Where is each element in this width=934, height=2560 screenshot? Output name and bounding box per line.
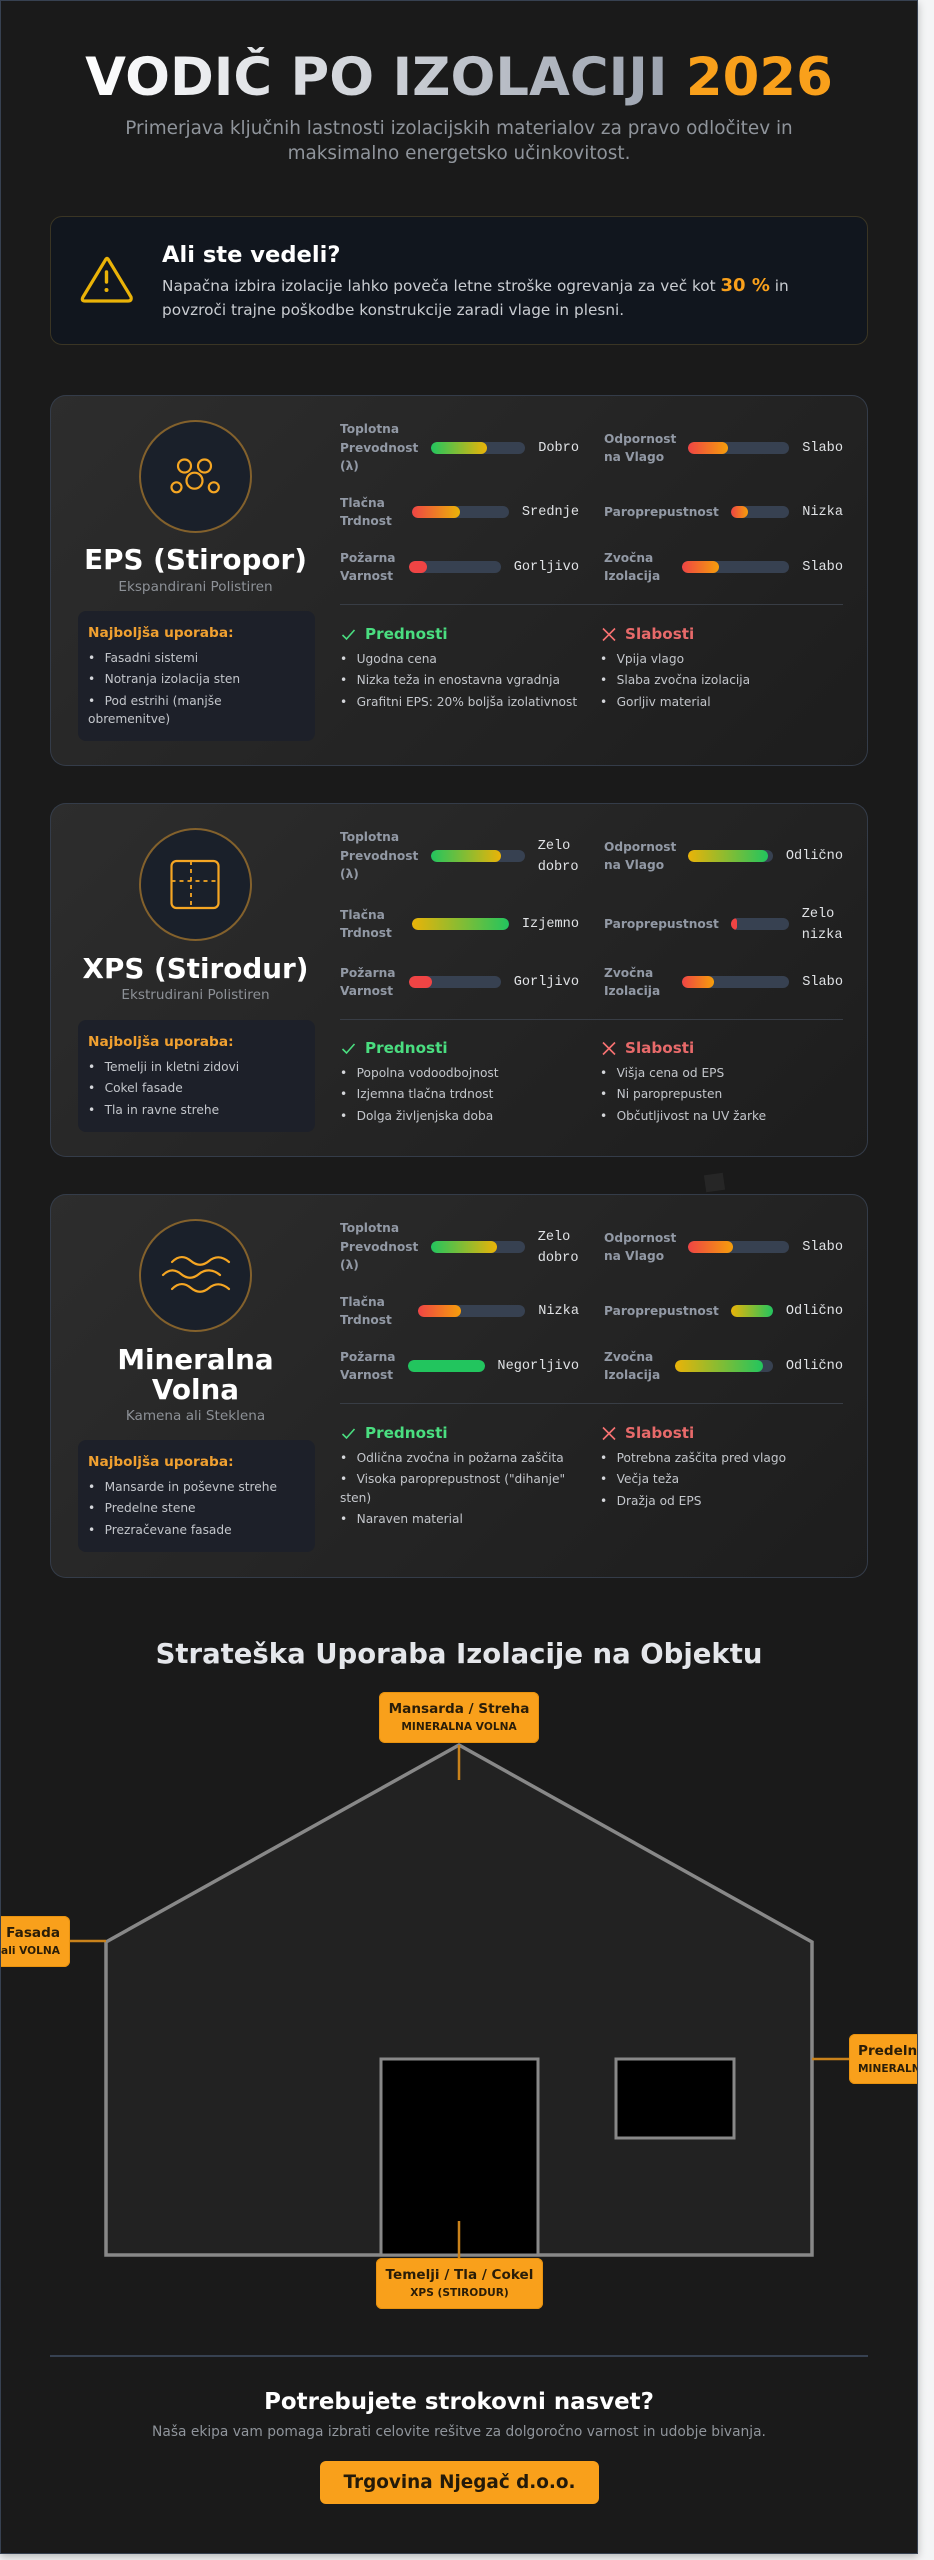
advantages bbox=[340, 1424, 590, 1524]
metric: moisture resistance: Odpornost bbox=[604, 1231, 676, 1245]
metric: compressive strength: Tlačna bbox=[340, 496, 385, 510]
alert heading: Ali ste vedeli? bbox=[162, 242, 340, 268]
disadvantages list: Ni paroprepusten bbox=[617, 1087, 722, 1101]
metric: thermal conductivity: (λ) bbox=[340, 459, 359, 473]
advantages bbox=[340, 1039, 499, 1123]
metric: fire safety: Požarna bbox=[340, 966, 396, 980]
best use list: • bbox=[88, 651, 95, 665]
material name: XPS (Stirodur) bbox=[83, 952, 308, 985]
icon: XPS board bbox=[139, 828, 252, 941]
metric: compressive strength: Srednje bbox=[522, 505, 579, 520]
metric: sound insulation: Zvočna bbox=[604, 1350, 653, 1364]
roof material: MINERALNA VOLNA bbox=[401, 1721, 517, 1733]
advantages list: • bbox=[340, 652, 347, 666]
alert text: povzroči trajne poškodbe konstrukcije zaradi vlage in plesni. bbox=[162, 301, 624, 319]
metric: moisture resistance: na Vlago bbox=[604, 858, 664, 872]
metric: thermal conductivity: Prevodnost bbox=[340, 441, 418, 455]
metric: compressive strength: Trdnost bbox=[340, 926, 392, 940]
best use list: Mansarde in poševne strehe bbox=[105, 1480, 277, 1494]
metric: compressive strength: Tlačna bbox=[340, 1295, 385, 1309]
metric: sound insulation: Izolacija bbox=[604, 569, 660, 583]
metric: thermal conductivity: Prevodnost bbox=[340, 849, 418, 863]
metric: fire safety: Požarna bbox=[340, 1350, 396, 1364]
metric: compressive strength: Trdnost bbox=[340, 1313, 392, 1327]
icon: warning triangle bbox=[80, 256, 133, 303]
alert text bbox=[162, 275, 789, 319]
metric: thermal conductivity: dobro bbox=[538, 860, 578, 875]
metric: moisture resistance: Slabo bbox=[802, 441, 843, 456]
disadvantages heading: Slabosti bbox=[625, 625, 694, 643]
material subtitle: Kamena ali Steklena bbox=[126, 1408, 265, 1424]
best use list: • bbox=[88, 1523, 95, 1537]
metric: vapour permeability: Zelo bbox=[802, 906, 834, 922]
best use list: • bbox=[88, 1501, 95, 1515]
disadvantages list: • bbox=[600, 1494, 607, 1508]
metric: moisture resistance: Slabo bbox=[802, 1240, 843, 1255]
metric: compressive strength bbox=[340, 908, 579, 940]
advantages list: Grafitni EPS: 20% boljša izolativnost bbox=[357, 695, 577, 709]
metric: thermal conductivity bbox=[340, 830, 578, 881]
metric: fire safety: Gorljivo bbox=[514, 560, 579, 575]
metric: moisture resistance: na Vlago bbox=[604, 1249, 664, 1263]
company button bbox=[320, 2461, 599, 2504]
metric: fire safety: Varnost bbox=[340, 569, 393, 583]
company button: Trgovina Njegač d.o.o. bbox=[343, 2472, 576, 2493]
best use list: Cokel fasade bbox=[105, 1081, 183, 1095]
best use list bbox=[88, 1480, 277, 1537]
best use list: • bbox=[88, 694, 95, 708]
metric: sound insulation: Slabo bbox=[802, 975, 843, 990]
disadvantages list: • bbox=[600, 673, 607, 687]
disadvantages list: • bbox=[600, 1472, 607, 1486]
advantages list: sten) bbox=[340, 1491, 371, 1505]
metric: sound insulation: Zvočna bbox=[604, 966, 653, 980]
metric: thermal conductivity: Toplotna bbox=[340, 1221, 399, 1235]
advantages list: • bbox=[340, 1066, 347, 1080]
panel: mineral wool card bbox=[50, 1194, 868, 1578]
metric: thermal conductivity bbox=[340, 422, 579, 473]
callout: facade bbox=[0, 1916, 70, 1967]
icon: check bbox=[342, 1044, 355, 1054]
metric: vapour permeability bbox=[604, 1304, 843, 1319]
metric: sound insulation bbox=[604, 1338, 843, 1394]
advantages list: • bbox=[340, 1472, 347, 1486]
metric: moisture resistance: Odpornost bbox=[604, 840, 676, 854]
disadvantages bbox=[600, 1424, 850, 1524]
best use list bbox=[88, 1060, 239, 1117]
advantages list bbox=[340, 1449, 565, 1531]
metric: fire safety bbox=[340, 551, 579, 583]
best use list: Pod estrihi (manjše bbox=[105, 694, 222, 708]
disadvantages list: • bbox=[600, 1066, 607, 1080]
metric: fire safety: Varnost bbox=[340, 1368, 393, 1382]
metric: vapour permeability bbox=[604, 906, 842, 943]
metric: sound insulation: Zvočna bbox=[604, 551, 653, 565]
icon: cross bbox=[602, 1042, 616, 1056]
advantages heading: Prednosti bbox=[365, 625, 448, 643]
alert text: Napačna izbira izolacije lahko poveča letne stroške ogrevanja za več kot 30 % in bbox=[162, 275, 789, 296]
icon: cross bbox=[600, 1425, 616, 1441]
disadvantages list: Višja cena od EPS bbox=[617, 1066, 724, 1080]
advantages list: Izjemna tlačna trdnost bbox=[357, 1087, 493, 1101]
metric: vapour permeability: Paroprepustnost bbox=[604, 917, 719, 931]
advantages list: • bbox=[340, 695, 347, 709]
metric: moisture resistance bbox=[604, 432, 843, 464]
best use list: • bbox=[88, 672, 95, 686]
material name: Mineralna bbox=[117, 1343, 274, 1376]
best use list: • bbox=[88, 1081, 95, 1095]
best use box bbox=[78, 1020, 315, 1132]
footer text: Naša ekipa vam pomaga izbrati celovite rešitve za dolgoročno varnost in udobje bivanja. bbox=[152, 2424, 766, 2440]
metric: fire safety bbox=[340, 1350, 579, 1382]
metric: thermal conductivity: Prevodnost bbox=[340, 1240, 418, 1254]
best use list: obremenitve) bbox=[88, 712, 170, 726]
advantages list: Popolna vodoodbojnost bbox=[357, 1066, 499, 1080]
best use list: • bbox=[88, 1480, 95, 1494]
metric: vapour permeability: Paroprepustnost bbox=[604, 505, 719, 519]
advantages list: • bbox=[340, 1451, 347, 1465]
metric: thermal conductivity: Zelo bbox=[538, 838, 570, 854]
advantages list: • bbox=[340, 673, 347, 687]
advantages list bbox=[340, 1066, 499, 1123]
metric: vapour permeability: nizka bbox=[802, 928, 842, 943]
disadvantages list: Slaba zvočna izolacija bbox=[617, 673, 750, 687]
header subtitle: maksimalno energetsko učinkovitost. bbox=[288, 143, 630, 164]
best use list: • bbox=[88, 1103, 95, 1117]
metric: compressive strength: Nizka bbox=[538, 1304, 579, 1319]
best use list: Temelji in kletni zidovi bbox=[105, 1060, 239, 1074]
advantages list: Dolga življenjska doba bbox=[357, 1109, 493, 1123]
metric: vapour permeability bbox=[604, 505, 843, 520]
disadvantages list: • bbox=[600, 652, 607, 666]
roof label: Mansarda / Streha bbox=[389, 1701, 529, 1717]
metric: thermal conductivity: (λ) bbox=[340, 1258, 359, 1272]
metric: sound insulation: Izolacija bbox=[604, 1368, 660, 1382]
icon: check bbox=[342, 630, 355, 640]
decorative smudge mark bbox=[704, 1173, 725, 1192]
metric: sound insulation: Slabo bbox=[802, 560, 843, 575]
metric: thermal conductivity bbox=[340, 1221, 578, 1272]
metric: fire safety: Negorljivo bbox=[497, 1359, 579, 1374]
disadvantages list: Občutljivost na UV žarke bbox=[617, 1109, 766, 1123]
foundations label: Temelji / Tla / Cokel bbox=[386, 2267, 533, 2283]
best use list: Prezračevane fasade bbox=[105, 1523, 232, 1537]
metric: moisture resistance bbox=[604, 840, 843, 872]
metric: moisture resistance: Odpornost bbox=[604, 432, 676, 446]
advantages list: • bbox=[340, 1512, 347, 1526]
advantages list: Visoka paroprepustnost ("dihanje" bbox=[357, 1472, 565, 1486]
best use heading: Najboljša uporaba: bbox=[88, 1454, 234, 1470]
icon: EPS beads bbox=[139, 420, 252, 533]
metric: sound insulation bbox=[604, 551, 843, 583]
advantages list: • bbox=[340, 1109, 347, 1123]
panel: EPS card bbox=[50, 395, 868, 766]
foundations material: XPS (STIRODUR) bbox=[410, 2287, 509, 2299]
disadvantages list: • bbox=[600, 1087, 607, 1101]
metric: vapour permeability: Nizka bbox=[802, 505, 843, 520]
disadvantages list: Večja teža bbox=[617, 1472, 679, 1486]
metric: fire safety: Varnost bbox=[340, 984, 393, 998]
best use list: Predelne stene bbox=[105, 1501, 196, 1515]
icon: wool waves bbox=[139, 1219, 252, 1332]
icon: check bbox=[340, 1425, 356, 1441]
metric: moisture resistance: Odlično bbox=[786, 849, 843, 864]
disadvantages list: Dražja od EPS bbox=[617, 1494, 701, 1508]
metric: vapour permeability: Odlično bbox=[786, 1304, 843, 1319]
advantages list: Naraven material bbox=[357, 1512, 463, 1526]
icon: cross bbox=[602, 628, 616, 642]
disadvantages list: • bbox=[600, 1451, 607, 1465]
metric: fire safety: Gorljivo bbox=[514, 975, 579, 990]
metric: thermal conductivity: Toplotna bbox=[340, 830, 399, 844]
best use list bbox=[88, 651, 240, 726]
best use list: Notranja izolacija sten bbox=[105, 672, 240, 686]
metric: fire safety: Požarna bbox=[340, 551, 396, 565]
facade label: Fasada bbox=[6, 1925, 60, 1941]
advantages list: Nizka teža in enostavna vgradnja bbox=[357, 673, 560, 687]
best use list: Tla in ravne strehe bbox=[105, 1103, 219, 1117]
advantages list: Ugodna cena bbox=[357, 652, 437, 666]
metric: vapour permeability: Paroprepustnost bbox=[604, 1304, 719, 1318]
disadvantages list bbox=[600, 1066, 766, 1123]
disadvantages bbox=[600, 625, 750, 709]
callout: roof bbox=[379, 1692, 539, 1743]
metric: compressive strength: Izjemno bbox=[522, 917, 579, 932]
metric: thermal conductivity: Toplotna bbox=[340, 422, 399, 436]
metric: thermal conductivity: (λ) bbox=[340, 867, 359, 881]
advantages list: Odlična zvočna in požarna zaščita bbox=[357, 1451, 564, 1465]
best use list: • bbox=[88, 1060, 95, 1074]
disadvantages list: • bbox=[600, 1109, 607, 1123]
header subtitle bbox=[125, 118, 793, 164]
metric: sound insulation: Izolacija bbox=[604, 984, 660, 998]
disadvantages list: Gorljiv material bbox=[617, 695, 711, 709]
advantages list bbox=[340, 652, 577, 709]
disadvantages heading: Slabosti bbox=[625, 1424, 694, 1442]
material subtitle: Ekspandirani Polistiren bbox=[118, 579, 273, 595]
best use list: Fasadni sistemi bbox=[105, 651, 198, 665]
advantages heading: Prednosti bbox=[365, 1039, 448, 1057]
disadvantages list bbox=[600, 1449, 786, 1513]
metric: moisture resistance: na Vlago bbox=[604, 450, 664, 464]
best use box bbox=[78, 611, 315, 741]
best use heading: Najboljša uporaba: bbox=[88, 1034, 234, 1050]
metric: compressive strength: Tlačna bbox=[340, 908, 385, 922]
panel: did you know alert bbox=[50, 216, 868, 345]
metric: compressive strength bbox=[340, 496, 579, 528]
metric: sound insulation: Odlično bbox=[786, 1359, 843, 1374]
disadvantages list: • bbox=[600, 695, 607, 709]
metric: fire safety bbox=[340, 966, 579, 998]
header title: VODIČ PO IZOLACIJI 2026 bbox=[85, 47, 833, 108]
metric: thermal conductivity: dobro bbox=[538, 1251, 578, 1266]
metric: thermal conductivity: Dobro bbox=[538, 441, 579, 456]
panel: XPS card bbox=[50, 803, 868, 1157]
disadvantages list bbox=[600, 652, 750, 709]
metric: compressive strength: Trdnost bbox=[340, 514, 392, 528]
advantages bbox=[340, 625, 577, 709]
material name bbox=[117, 1343, 274, 1406]
disadvantages bbox=[600, 1039, 766, 1123]
material name: Volna bbox=[152, 1373, 239, 1406]
footer heading: Potrebujete strokovni nasvet? bbox=[264, 2389, 654, 2415]
best use heading: Najboljša uporaba: bbox=[88, 625, 234, 641]
disadvantages heading: Slabosti bbox=[625, 1039, 694, 1057]
metric: compressive strength bbox=[340, 1295, 579, 1327]
house section heading: Strateška Uporaba Izolacije na Objektu bbox=[156, 1638, 762, 1670]
metric: thermal conductivity: Zelo bbox=[538, 1230, 570, 1244]
metric: moisture resistance bbox=[604, 1231, 843, 1263]
advantages list: • bbox=[340, 1087, 347, 1101]
disadvantages list: Vpija vlago bbox=[617, 652, 684, 666]
callout: foundations bbox=[376, 2258, 543, 2309]
material subtitle: Ekstrudirani Polistiren bbox=[121, 987, 270, 1003]
advantages heading: Prednosti bbox=[365, 1424, 448, 1442]
disadvantages list: Potrebna zaščita pred vlago bbox=[617, 1451, 786, 1465]
material name: EPS (Stiropor) bbox=[84, 543, 307, 576]
best use box bbox=[78, 1440, 315, 1552]
metric: sound insulation bbox=[604, 966, 843, 998]
callout: partition walls bbox=[849, 2034, 934, 2084]
header subtitle: Primerjava ključnih lastnosti izolacijskih materialov za pravo odločitev in bbox=[125, 118, 793, 139]
